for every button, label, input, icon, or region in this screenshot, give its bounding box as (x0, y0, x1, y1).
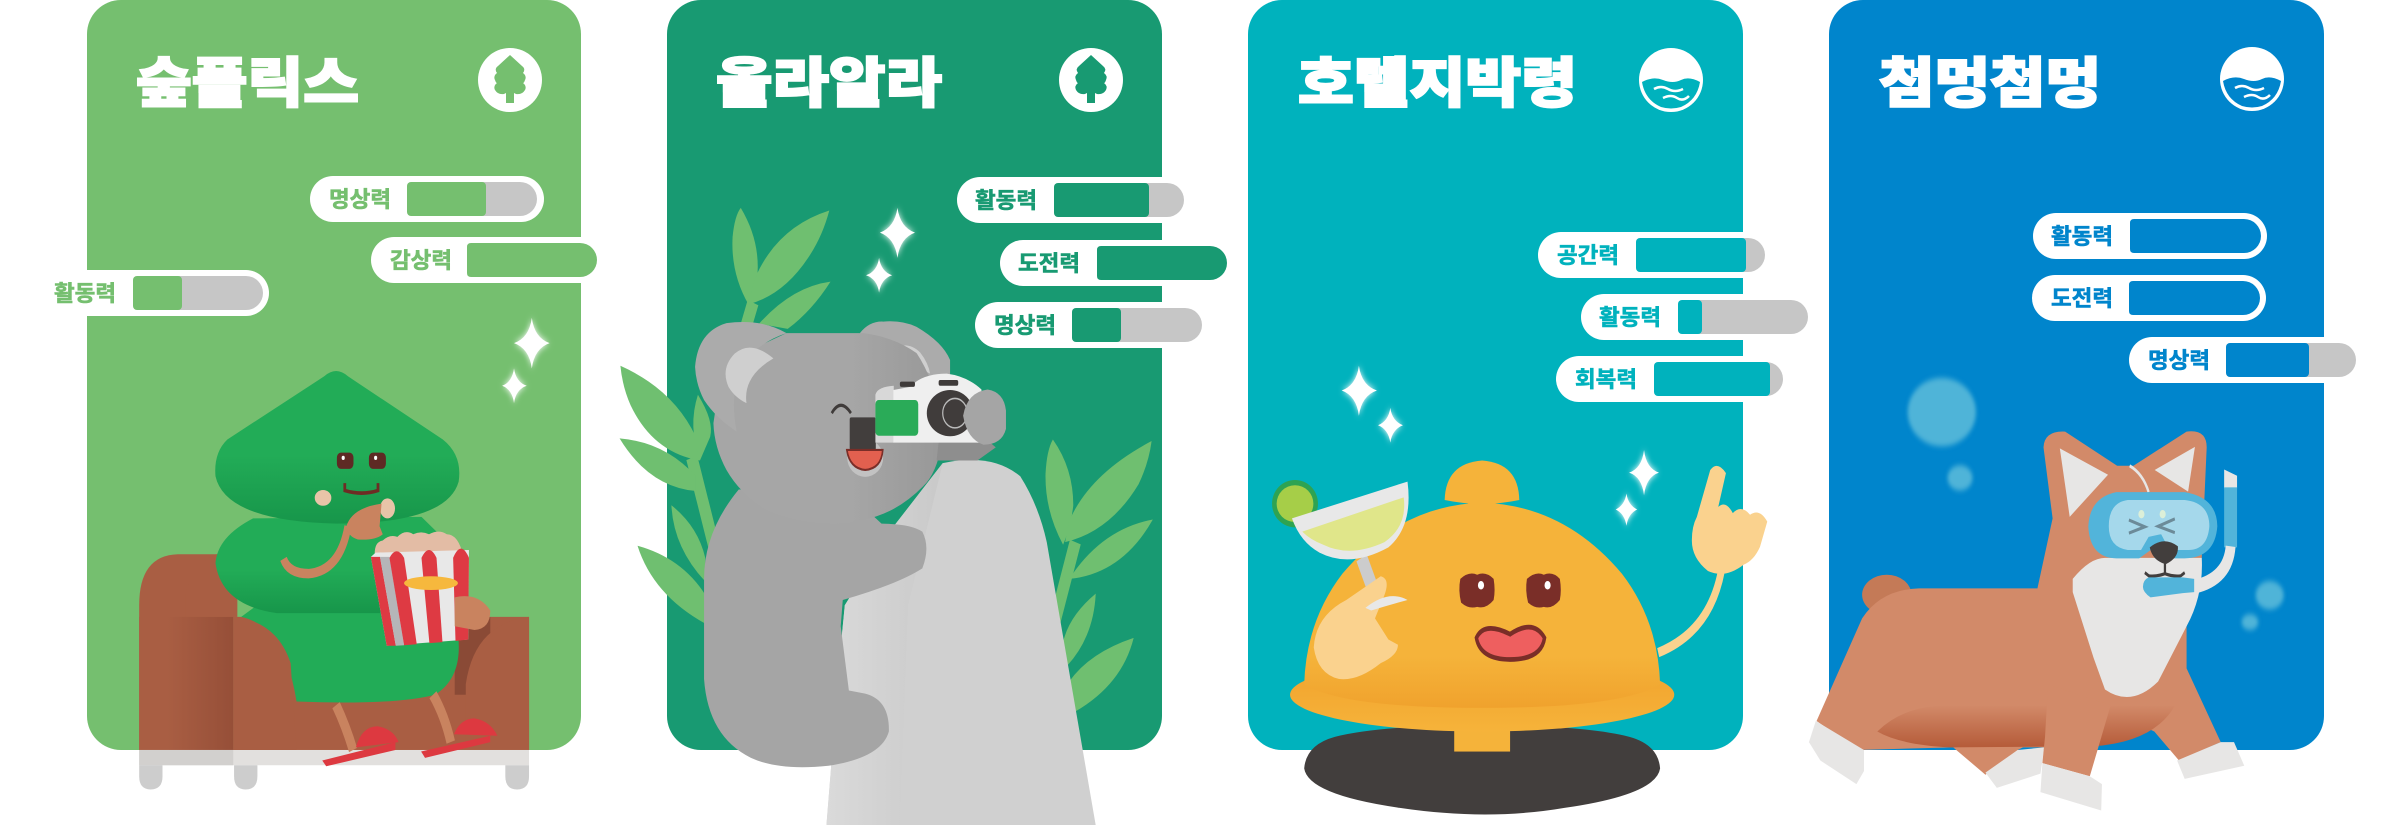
stat bar: 명상력 (2129, 337, 2363, 383)
stat bar: 도전력: 도전력 (2051, 286, 2113, 311)
icon: tree badge (1059, 48, 1123, 112)
icon: tree badge (478, 48, 542, 112)
stat bar: 도전력: 도전력 (1018, 251, 1080, 276)
card background (667, 0, 1162, 750)
card background (87, 0, 581, 750)
stat bar: 감상력: 감상력 (390, 248, 452, 273)
stat bar: 활동력: 활동력 (2051, 224, 2113, 249)
illustration: tree character on sofa (139, 371, 529, 789)
stat bar: 도전력 (1000, 240, 1234, 286)
stat bar: 활동력 (957, 177, 1191, 223)
panel: 첨멍첨멍 (1809, 0, 2363, 811)
panel: 숲플릭스 (35, 0, 605, 789)
icon: water badge (1639, 48, 1703, 112)
icon: water badge (2220, 47, 2284, 111)
illustration: cloche character (1272, 461, 1767, 814)
stat bar: 명상력: 명상력 (329, 187, 391, 212)
stat bar: 명상력 (975, 302, 1209, 348)
illustration: leaves (620, 208, 1153, 712)
stat bar: 회복력 (1556, 356, 1790, 402)
stat bar: 활동력 (2033, 213, 2267, 259)
stat bar: 활동력 (1581, 294, 1815, 340)
panel: 호텔지박령 (1248, 0, 1815, 814)
card background (1829, 0, 2324, 750)
sparkles (1342, 366, 1659, 526)
sparkles (866, 208, 915, 293)
illustration: koala with camera on tree trunk (695, 321, 1096, 825)
stat bar: 명상력 (310, 176, 544, 222)
stat bar: 명상력: 명상력 (994, 313, 1056, 338)
stat bar: 감상력 (371, 237, 605, 283)
stat bar: 회복력: 회복력 (1575, 367, 1637, 392)
illustration: corgi with snorkel (1809, 431, 2244, 811)
stat bar: 도전력 (2032, 275, 2266, 321)
stat bar: 공간력 (1538, 232, 1772, 278)
panel: 올라알라 (620, 0, 1234, 825)
stat bar: 활동력: 활동력 (975, 188, 1037, 213)
stat bar: 공간력: 공간력 (1557, 243, 1619, 268)
title: 숲플릭스 (136, 54, 359, 114)
title: 호텔지박령 (1298, 54, 1577, 114)
bubbles (1908, 378, 2284, 630)
title: 첨멍첨멍 (1879, 54, 2101, 114)
stat bar: 활동력: 활동력 (1599, 305, 1661, 330)
card background (1248, 0, 1743, 750)
stat bar: 활동력: 활동력 (54, 281, 116, 306)
stat bar: 활동력 (35, 270, 269, 316)
stat bar: 명상력: 명상력 (2148, 348, 2210, 373)
title: 올라알라 (716, 54, 942, 114)
sparkles (502, 318, 550, 403)
